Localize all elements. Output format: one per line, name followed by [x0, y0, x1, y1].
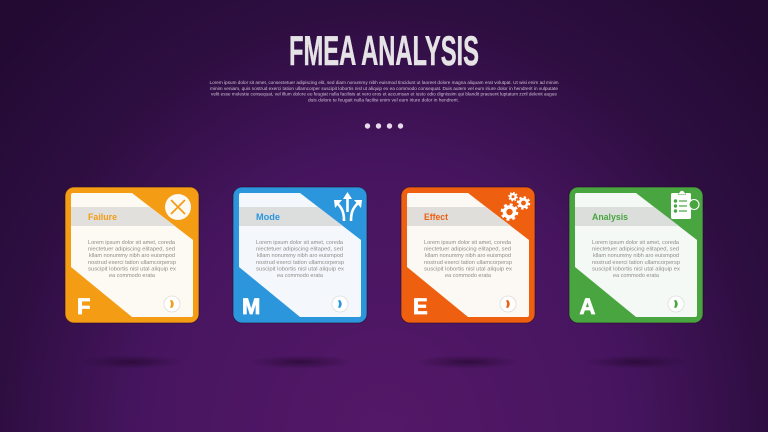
card text: Effect: Lorem ipsum dolor sit amet, coreda — [424, 240, 511, 246]
title: FMEA ANALYSIS — [289, 27, 479, 74]
card text: Mode: ea commodo erata — [277, 273, 323, 279]
arrow button — [332, 296, 348, 312]
panel: Effect — [401, 187, 535, 323]
card text: Effect: suscipit lobortis nisl utal aliquip ex — [424, 266, 512, 272]
intro paragraph — [210, 80, 559, 103]
card text: Failure: kllam nonummy nibh aro euismpod — [89, 253, 175, 259]
card text: Mode — [256, 240, 344, 279]
card text: Effect: niectetuer adipiscing elitaped, sed — [424, 247, 511, 253]
card text: Analysis: nostrud exerci tation ullamcorpersp — [592, 260, 680, 266]
panel: Failure — [65, 187, 199, 323]
card text: Effect — [424, 240, 512, 279]
icon: clipboard with magnifier — [671, 190, 699, 219]
card text: Analysis: Lorem ipsum dolor sit amet, coreda — [592, 240, 679, 246]
panel: Analysis — [569, 187, 703, 323]
intro paragraph: minim veniam, quis nostrud exerci tation ullamcorper suscipit lobortis nisl ut aliquip ex ea commodo consequat. Duis autem vel eum iriure dolor in hendrerit in vulputate — [210, 86, 558, 91]
intro paragraph: Lorem ipsum dolor sit amet, consectetuer adipiscing elit, sed diam nonummy nibh euismod tincidunt ut laoreet dolore magna aliquam erat volutpat. Ut wisi enim ad minim — [210, 80, 559, 85]
intro paragraph: duis dolore te feugait nulla facilisi enim vel eum iriure dolor in hendrerit. — [308, 98, 459, 103]
card text: Failure — [88, 240, 176, 279]
heading: Failure: Failure — [88, 212, 117, 223]
card text: Effect: ea commodo erata — [445, 273, 491, 279]
card text: Mode: suscipit lobortis nisl utal aliquip ex — [256, 266, 344, 272]
card text: Analysis: suscipit lobortis nisl utal aliquip ex — [592, 266, 680, 272]
card text: Analysis: ea commodo erata — [613, 273, 659, 279]
card text: Mode: niectetuer adipiscing elitaped, sed — [256, 247, 343, 253]
card text: Effect: kllam nonummy nibh aro euismpod — [425, 253, 511, 259]
card text: Mode: Lorem ipsum dolor sit amet, coreda — [256, 240, 343, 246]
pagination dots — [365, 123, 403, 129]
card text: Failure: ea commodo erata — [109, 273, 155, 279]
arrow button — [164, 296, 180, 312]
card text: Analysis — [592, 240, 680, 279]
card text: Failure: Lorem ipsum dolor sit amet, coreda — [88, 240, 175, 246]
card text: Effect: nostrud exerci tation ullamcorpersp — [424, 260, 512, 266]
card shadows on floor — [80, 355, 688, 369]
card text: Mode: kllam nonummy nibh aro euismpod — [257, 253, 343, 259]
heading: Mode: Mode — [256, 212, 280, 223]
icon: gears — [502, 193, 529, 220]
arrow button — [668, 296, 684, 312]
arrow button — [500, 296, 516, 312]
letter A: A — [580, 294, 596, 319]
icon: cross in circle — [165, 194, 191, 220]
card text: Analysis: kllam nonummy nibh aro euismpod — [593, 253, 679, 259]
panel: Mode — [233, 187, 367, 323]
card text: Mode: nostrud exerci tation ullamcorpersp — [256, 260, 344, 266]
icon: diverging arrows — [334, 192, 362, 221]
card text: Failure: nostrud exerci tation ullamcorpersp — [88, 260, 176, 266]
heading: Analysis: Analysis — [592, 212, 628, 223]
letter M: M — [242, 294, 260, 319]
letter E: E — [413, 294, 428, 319]
card text: Analysis: niectetuer adipiscing elitaped, sed — [592, 247, 679, 253]
intro paragraph: velit esse molestie consequat, vel illum dolore eu feugiat nulla facilisis at vero eros et accumsan et iusto odio dignissim qui blandit praesent luptatum zzril delenit augue — [211, 92, 557, 97]
letter F: F — [77, 294, 90, 319]
card text: Failure: suscipit lobortis nisl utal aliquip ex — [88, 266, 176, 272]
card text: Failure: niectetuer adipiscing elitaped, sed — [88, 247, 175, 253]
heading: Effect: Effect — [424, 212, 449, 223]
